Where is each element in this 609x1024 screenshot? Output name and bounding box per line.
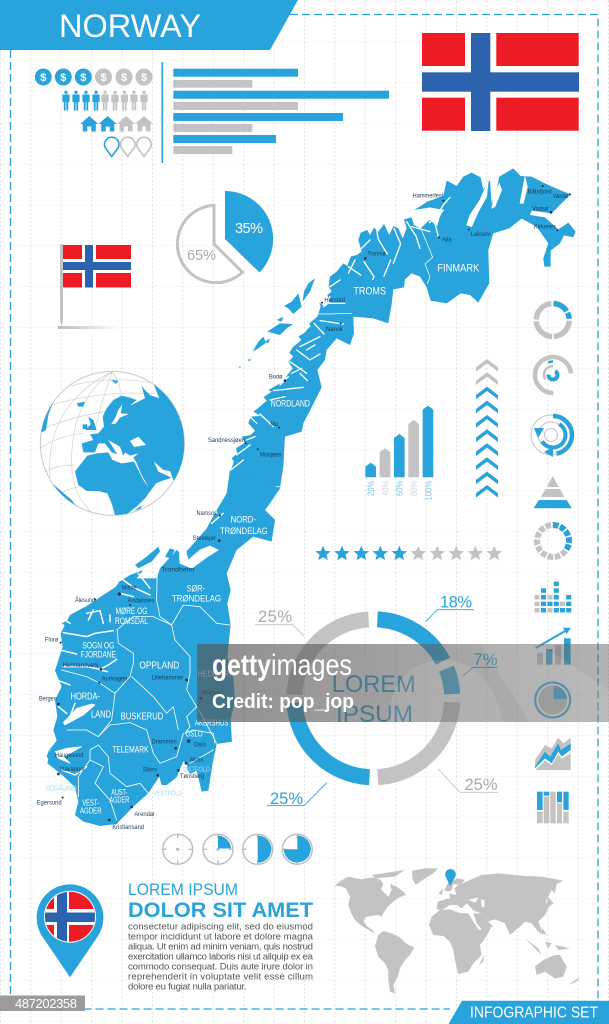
county and city labels north: Lakselv — [471, 231, 491, 238]
bar percentage labels: 80% — [409, 481, 419, 496]
southern Norway — [37, 470, 280, 831]
donut callouts: 7% — [474, 651, 498, 669]
city labels south: Aurlvagen — [102, 676, 128, 683]
city labels south: Steinkjer — [193, 535, 216, 542]
city labels south: Lillehammer — [152, 675, 183, 682]
world map — [334, 868, 580, 993]
small flag on pole — [58, 244, 131, 329]
watermark band — [197, 644, 609, 722]
county and city labels north: Båtsfjord — [528, 187, 552, 195]
county labels south: BUSKERUD — [121, 712, 163, 723]
clock progress icons — [163, 834, 312, 864]
horizontal bar chart — [162, 62, 389, 163]
watermark text: Credit: pop_jop — [212, 690, 354, 713]
icon row: dollars: $ — [121, 72, 127, 84]
city labels south: Drammen — [152, 739, 177, 746]
county and city labels north: Vadsø — [532, 206, 548, 213]
city labels south: Ålesund — [75, 595, 95, 604]
world map pin — [445, 869, 456, 886]
county and city labels north: Bodø — [269, 373, 283, 380]
county and city labels north: Vardø — [553, 193, 568, 200]
icon row: map pins — [105, 137, 151, 156]
icon row: dollars: $ — [80, 72, 86, 84]
watermark text: getty — [212, 649, 271, 682]
text block: tempor incididunt ut labore et dolore magna — [128, 932, 314, 943]
city labels south: Trondheim — [161, 566, 194, 573]
county labels south: TRØNDELAG — [220, 526, 268, 536]
bar percentage labels: 20% — [366, 481, 376, 496]
pie chart 35/65: 65% — [187, 248, 216, 264]
icon: concentric arcs — [535, 357, 571, 393]
chevron arrow stack — [476, 359, 498, 498]
county and city labels north: FINMARK — [437, 263, 480, 275]
county labels south: SOGN OG — [82, 640, 114, 650]
city labels south: Arendal — [134, 811, 154, 818]
city labels south: Haugesund — [55, 752, 84, 759]
icon row: dollars: $ — [141, 72, 147, 84]
city labels south: Åndalsnes — [128, 596, 154, 605]
donut callouts: 18% — [440, 593, 472, 611]
bar percentage labels: 40% — [380, 481, 390, 496]
text block: DOLOR SIT AMET — [128, 899, 313, 922]
county labels south: LAND — [91, 710, 111, 721]
fjords south — [55, 500, 223, 775]
county and city labels north: Hammerfest — [413, 193, 444, 200]
donut callouts: 25% — [258, 608, 292, 626]
outside county labels — [46, 764, 210, 798]
text block: commodo consequat. Duis aute irure dolor in — [128, 961, 313, 972]
county and city labels north — [208, 185, 571, 459]
icon: pyramid — [534, 476, 572, 508]
watermark text — [212, 649, 354, 713]
county and city labels north: Mosjøen — [260, 452, 282, 459]
title banner: NORWAY — [59, 8, 201, 44]
county and city labels north: Mo — [271, 421, 279, 428]
county labels south: TRØNDELAG — [172, 594, 221, 604]
county and city labels north: Harstad — [324, 297, 345, 304]
county and city labels north: Sandnessjøen — [208, 437, 245, 444]
Oslo star — [186, 738, 191, 743]
city markers south — [57, 515, 221, 821]
county labels south: AGDER — [109, 796, 129, 805]
globe graticule — [40, 372, 170, 513]
county labels south: TELEMARK — [112, 745, 149, 755]
watermark text: images — [271, 649, 352, 682]
globe — [40, 371, 190, 515]
county labels south: OSLO — [186, 730, 203, 739]
text block: exercitation ullamco laboris nisi ut aliquip ex ea — [128, 952, 314, 963]
county labels south: MØRE OG — [116, 606, 147, 616]
city labels south: Florø — [45, 637, 58, 644]
icon row: dollars: $ — [60, 72, 66, 84]
city labels south: Kristiansand — [112, 824, 144, 831]
county labels south — [71, 515, 268, 815]
inland seas on globe — [111, 404, 146, 447]
donut callouts — [255, 593, 498, 808]
globe continents — [40, 380, 190, 515]
county borders north — [232, 231, 433, 495]
icon row: houses — [80, 116, 153, 132]
bar percentage labels: 60% — [395, 481, 405, 496]
text block — [128, 881, 314, 992]
Lofoten islands — [239, 278, 317, 368]
county labels south: AUST- — [111, 788, 128, 797]
county labels south: HEDMARK — [197, 670, 235, 679]
Oslofjord — [176, 762, 188, 778]
county and city labels north: NORDLAND — [271, 399, 310, 409]
text block: reprehenderit in voluptate velit esse cillum — [128, 971, 313, 982]
coastal islands south — [47, 547, 175, 762]
title banner — [0, 0, 298, 50]
donut centre text: IPSUM — [336, 701, 413, 728]
donut callouts: 25% — [464, 776, 498, 794]
outside county labels: VESTFOLD — [153, 789, 183, 798]
city labels south: Egersund — [37, 800, 62, 807]
world map seas — [468, 897, 484, 907]
pie chart 35/65: 35% — [235, 221, 263, 237]
county labels south: SØR- — [187, 584, 205, 594]
city labels south: Tønsberg — [180, 773, 205, 780]
county labels south: ROMSDAL — [115, 616, 148, 626]
stars rating — [315, 546, 502, 560]
northern Norway — [208, 168, 576, 527]
icon: radar with arrows — [531, 415, 572, 457]
text block: aliqua. Ut enim ad minim veniam, quis nostrud — [128, 942, 313, 953]
county labels south: OPPLAND — [139, 660, 179, 671]
county and city labels north: Tromsø — [367, 250, 386, 257]
city labels south: Skien — [143, 766, 157, 773]
main donut chart — [255, 593, 498, 808]
large Norwegian flag — [422, 33, 579, 131]
donut centre text: LOREM — [332, 671, 416, 698]
county labels south: HORDA- — [71, 692, 100, 703]
city labels south: Hamar — [203, 690, 220, 697]
outside county labels: ØSTFOLD — [183, 764, 210, 773]
county borders south — [62, 567, 230, 820]
county and city labels north: TROMS — [353, 285, 386, 297]
icon: block equalizer — [534, 582, 571, 612]
county and city labels north: Narvik — [326, 326, 343, 333]
map of Norway — [37, 168, 576, 831]
city labels south — [37, 510, 220, 831]
watermark facets — [386, 644, 609, 722]
county labels south: NORD- — [231, 515, 256, 525]
footer banner — [448, 1001, 609, 1024]
icon row: dollars: $ — [100, 72, 107, 84]
icon: column blocks — [537, 792, 569, 823]
map pin with flag — [37, 884, 103, 977]
donut callouts: 25% — [270, 790, 303, 808]
icon: segmented ring — [536, 304, 569, 336]
bar percentage labels — [366, 481, 433, 501]
icon: growth bars with arrow — [536, 628, 571, 665]
icon row: dollars: $ — [40, 72, 46, 84]
icon: area chart — [535, 738, 571, 770]
icon row: people — [62, 91, 148, 110]
city labels south: Stavanger — [59, 766, 85, 773]
pie chart 35/65 — [177, 191, 273, 283]
text block: LOREM IPSUM — [128, 881, 238, 899]
county labels south: AGDER — [80, 806, 102, 815]
county and city labels north: Alta — [442, 236, 452, 243]
city labels south: Molde — [122, 584, 137, 591]
city labels south: Hermansverk — [63, 662, 99, 669]
donut centre text — [332, 671, 416, 728]
county and city labels north: Kirkenes — [534, 223, 556, 230]
county labels south: VEST- — [82, 798, 99, 807]
city labels south: Bergen — [39, 696, 57, 703]
text block: consectetur adipiscing elit, sed do eiusmod — [128, 922, 313, 933]
icon row: dollars — [35, 68, 152, 86]
text block: dolore eu fugiat nulla pariatur. — [128, 981, 246, 992]
fjords north — [230, 177, 527, 471]
icon: dotted ring — [537, 525, 569, 557]
icon: pie in ring — [535, 682, 570, 718]
bar percentage labels: 100% — [423, 481, 433, 501]
outside county labels: ROGALAND — [46, 783, 77, 792]
city labels south: Moss — [190, 756, 203, 763]
rising bar chart — [365, 406, 433, 501]
county labels south: FJORDANE — [81, 650, 116, 660]
city labels south: Oslo — [194, 742, 206, 749]
county labels south: AKERSHUS — [195, 719, 228, 728]
image id tag: 487202358 — [15, 996, 77, 1011]
city labels south: Namsos — [197, 510, 217, 517]
